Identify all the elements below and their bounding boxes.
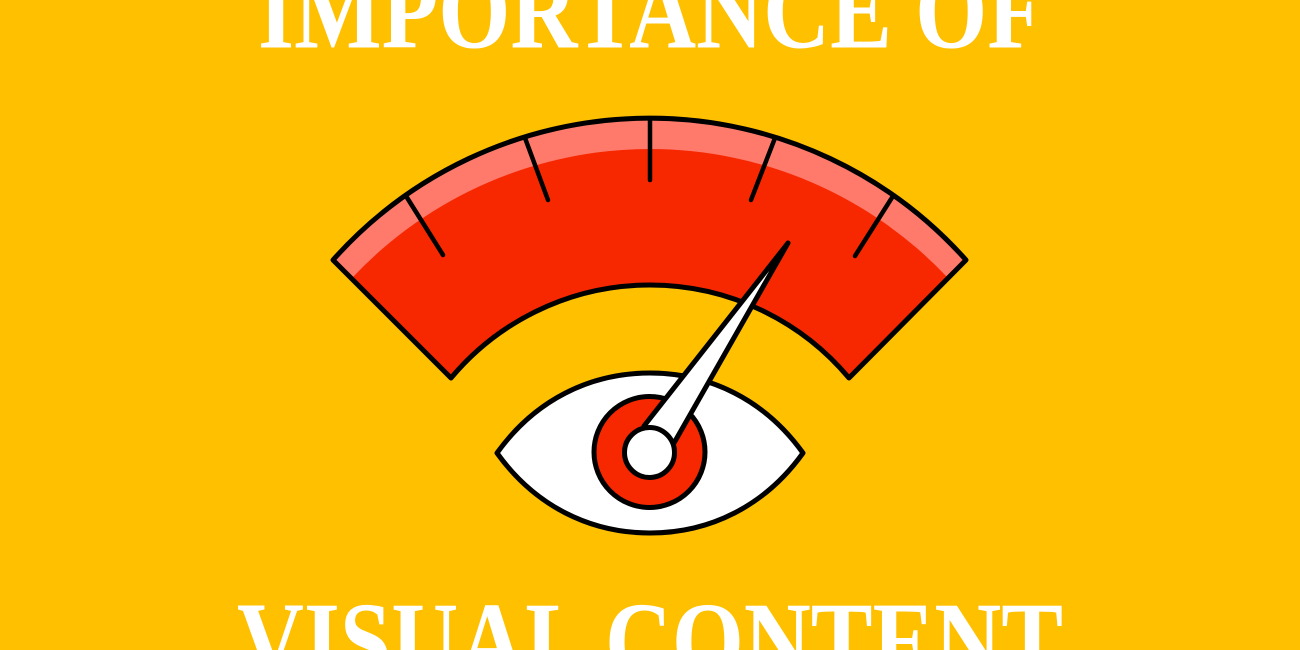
gauge (333, 118, 966, 378)
iris (594, 396, 705, 508)
gauge ticks (406, 119, 893, 256)
eye white (497, 373, 803, 533)
gauge highlight (333, 118, 966, 277)
icon: eye (497, 373, 803, 533)
gauge band (333, 118, 966, 378)
gauge outline (333, 118, 966, 378)
needle pointer (644, 243, 788, 443)
needle hub (624, 428, 674, 478)
gauge needle (624, 243, 788, 478)
